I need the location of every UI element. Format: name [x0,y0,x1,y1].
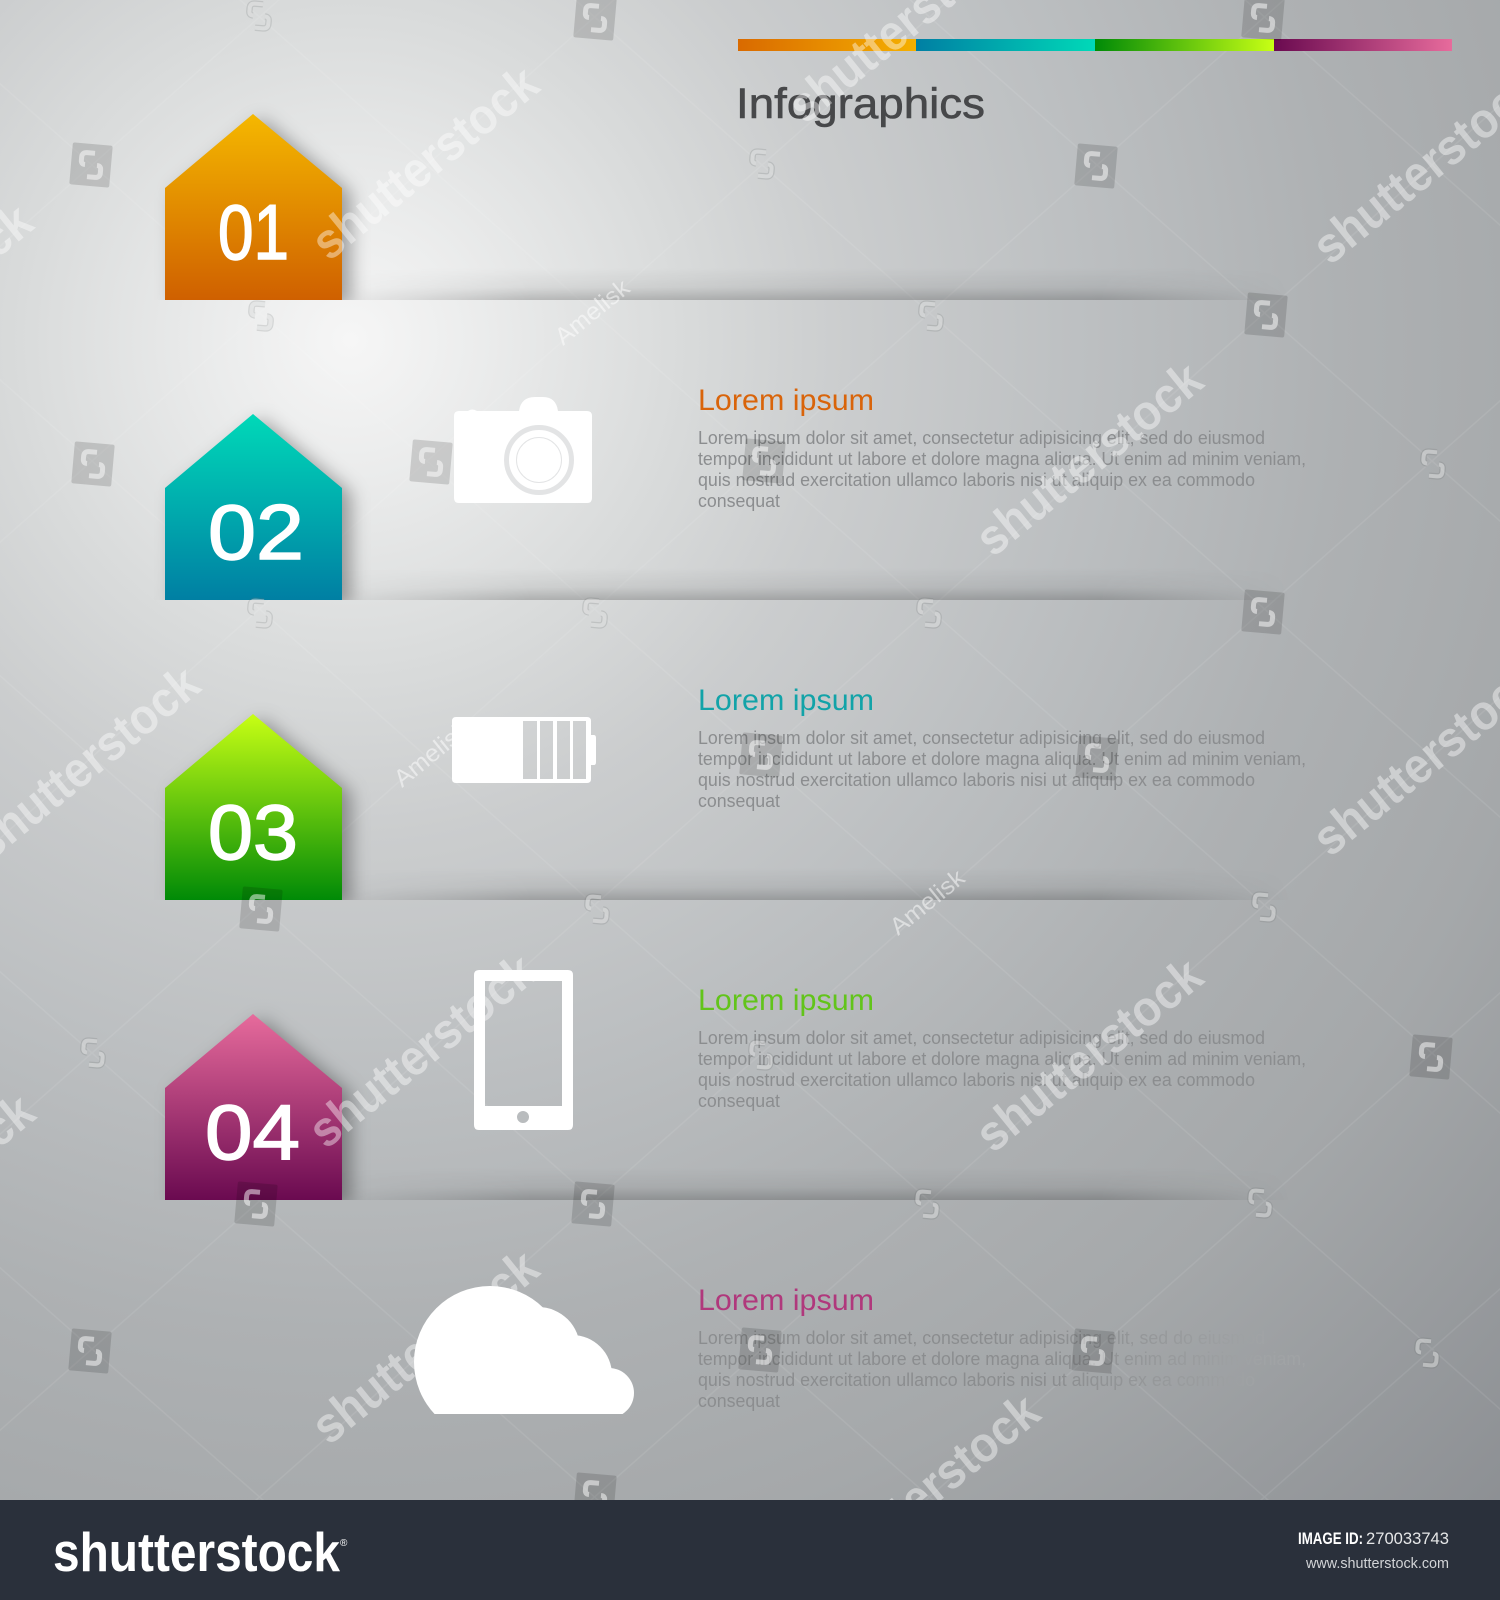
text block: step 2: consequat [698,791,780,811]
text block: step 1 [698,384,1306,511]
text block: step 4 [698,1284,1306,1411]
text block: step 1: Lorem ipsum dolor sit amet, consectetur adipisicing elit, sed do eiusmod [698,428,1265,448]
text block: step 3: tempor incididunt ut labore et dolore magna aliqua. Ut enim ad minim veniam, [698,1049,1306,1069]
shutterstock watermarks: shutterstock [298,942,546,1159]
shutterstock watermarks: shutterstock [301,1238,549,1455]
text block: step 4: tempor incididunt ut labore et dolore magna aliqua. Ut enim ad minim veniam, [698,1349,1306,1369]
text block: step 3: Lorem ipsum [698,984,874,1017]
footer bar [0,1500,1500,1600]
contributor watermarks [389,274,971,941]
text block: step 2: Lorem ipsum dolor sit amet, consectetur adipisicing elit, sed do eiusmod [698,728,1265,748]
contributor watermarks: Amelisk [389,716,475,793]
website: www.shutterstock.com [1305,1555,1449,1572]
step 02 badge: 02 [208,488,304,576]
step 02 badge [165,414,351,605]
text block: step 3: quis nostrud exercitation ullamco laboris nisi ut aliquip ex ea commodo [698,1070,1255,1090]
text block: step 4: consequat [698,1391,780,1411]
contributor watermarks: Amelisk [550,274,636,351]
icon: battery [452,717,596,783]
step 03 badge [165,714,351,905]
text block: step 2: tempor incididunt ut labore et dolore magna aliqua. Ut enim ad minim veniam, [698,749,1306,769]
icon: smartphone [474,970,573,1130]
step 03 badge: 03 [208,788,298,876]
footer logo: shutterstock [53,1521,340,1583]
icon: camera [454,397,592,503]
image id number: 270033743 [1366,1530,1449,1548]
step 01 badge [165,114,351,305]
shutterstock watermarks: shutterstock [802,1382,1050,1599]
text block: step 3 [698,984,1306,1111]
text block: step 1: tempor incididunt ut labore et dolore magna aliqua. Ut enim ad minim veniam, [698,449,1306,469]
text block: step 4: Lorem ipsum [698,1284,874,1317]
registered mark: ® [340,1538,348,1549]
text block: step 3: Lorem ipsum dolor sit amet, consectetur adipisicing elit, sed do eiusmod [698,1028,1265,1048]
text block: step 2: quis nostrud exercitation ullamco laboris nisi ut aliquip ex ea commodo [698,770,1255,790]
text block: step 1: Lorem ipsum [698,384,874,417]
text block: step 1: consequat [698,491,780,511]
step 04 badge [165,1014,351,1205]
text block: step 4: Lorem ipsum dolor sit amet, consectetur adipisicing elit, sed do eiusmod [698,1328,1265,1348]
step 04 badge: 04 [205,1088,300,1176]
shutterstock watermarks: shutterstock [965,350,1213,567]
colour bar [738,39,1452,51]
step 01 badge: 01 [218,188,289,276]
title: Infographics [736,80,985,128]
image id label: IMAGE ID: [1298,1530,1363,1548]
text block: step 2: Lorem ipsum [698,684,874,717]
shutterstock watermarks: shutterstock [301,54,549,271]
shutterstock watermarks: shutterstock [965,946,1213,1163]
icon: cloud [414,1286,634,1414]
text block: step 2 [698,684,1306,811]
text block: step 3: consequat [698,1091,780,1111]
text block: step 1: quis nostrud exercitation ullamco laboris nisi ut aliquip ex ea commodo [698,470,1255,490]
text block: step 4: quis nostrud exercitation ullamco laboris nisi ut aliquip ex ea commodo [698,1370,1255,1390]
contributor watermarks: Amelisk [885,864,971,941]
fold shadow bands [342,268,1292,1200]
